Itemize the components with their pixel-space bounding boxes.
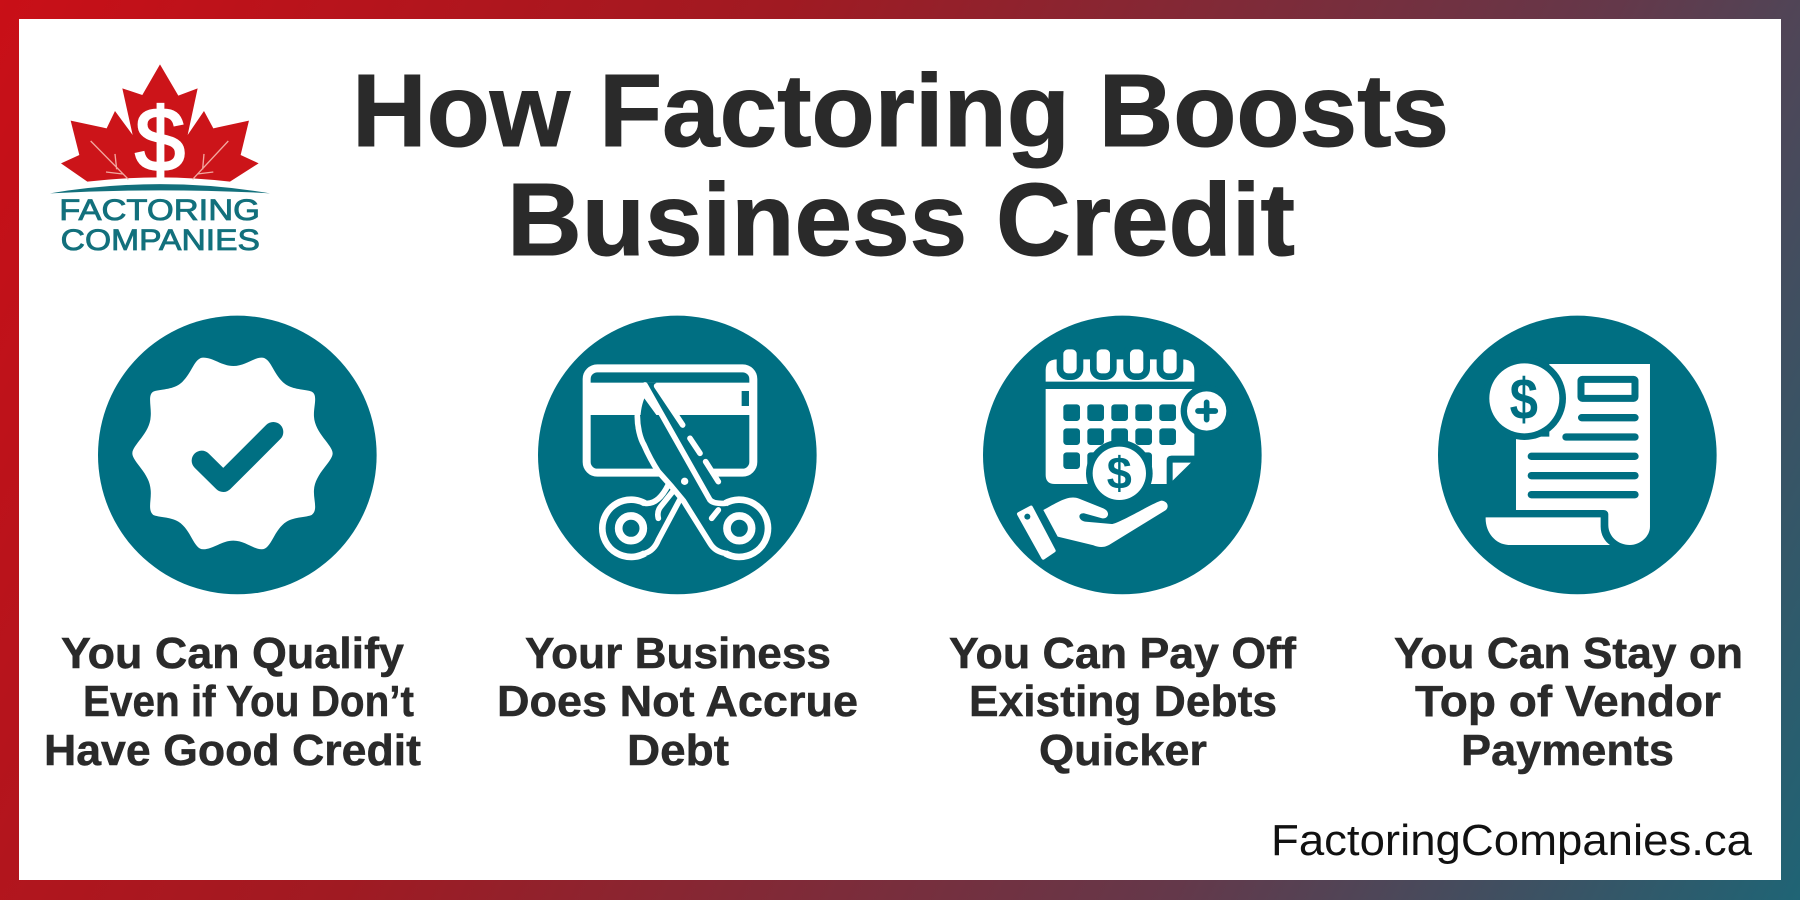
calendar body [1046, 389, 1194, 484]
left handle ring [602, 500, 645, 557]
caption 3 [949, 629, 1296, 775]
dollar coin [1483, 357, 1566, 440]
website url: FactoringCompanies.ca [1271, 816, 1753, 865]
plus badge [1181, 385, 1233, 437]
title line 1: How Factoring Boosts [352, 53, 1449, 168]
checkmark [202, 432, 273, 482]
caption 3: Existing Debts [969, 677, 1277, 726]
binder tabs [1060, 346, 1180, 377]
leaf veins [91, 141, 228, 179]
invoice page [1516, 364, 1650, 545]
invoice box [1581, 379, 1635, 398]
caption 1 [44, 629, 421, 775]
logo wordmark line 2: COMPANIES [61, 224, 260, 257]
caption 1: Even if You Don’t [83, 677, 414, 726]
right handle ring [725, 500, 768, 557]
icon: invoice with dollar coin [1438, 316, 1717, 594]
dollar stem [157, 167, 163, 180]
cuff button [1024, 514, 1030, 520]
caption 2: Does Not Accrue [497, 677, 858, 726]
title line 2: Business Credit [507, 162, 1295, 277]
date grid [1063, 404, 1176, 469]
teal circle [98, 316, 377, 594]
right blade band [647, 383, 722, 507]
card stripe [589, 383, 751, 415]
teal circle [1438, 316, 1717, 594]
caption 3: You Can Pay Off [949, 629, 1296, 678]
card signature box [742, 391, 749, 406]
teal circle [538, 316, 817, 594]
pivot [681, 478, 688, 485]
icon: maple leaf [61, 64, 259, 182]
icon: scissors cutting credit card [538, 316, 817, 594]
caption 3: Quicker [1039, 726, 1207, 775]
caption 2: Debt [627, 726, 729, 775]
corner fold [1173, 463, 1191, 481]
caption 2 [497, 629, 858, 775]
left blade crescent [640, 398, 715, 507]
coin: $ [1107, 448, 1132, 499]
caption 4: You Can Stay on [1394, 629, 1743, 678]
title [352, 53, 1449, 277]
card outline [587, 368, 753, 473]
dollar coin: $ [1510, 367, 1538, 432]
icon: verified badge with checkmark [98, 316, 377, 594]
coin [1086, 440, 1153, 507]
horizon arc [50, 184, 270, 193]
logo: Factoring Companies maple leaf [50, 64, 270, 257]
icon: calendar, coin and hand [983, 316, 1262, 594]
caption 4: Payments [1461, 726, 1674, 775]
caption 4: Top of Vendor [1415, 677, 1721, 726]
caption 1: You Can Qualify [61, 629, 405, 678]
caption 4 [1394, 629, 1743, 775]
scalloped badge [132, 358, 333, 549]
logo wordmark line 1: FACTORING [59, 194, 260, 227]
calendar header [1046, 359, 1194, 382]
scissor lines [637, 385, 725, 553]
scroll foot [1486, 517, 1610, 545]
right inner ring [727, 516, 752, 541]
left inner ring [619, 516, 643, 541]
invoice lines [1531, 418, 1635, 495]
teal circle [983, 316, 1262, 594]
caption 1: Have Good Credit [44, 726, 421, 775]
cuff [1019, 508, 1054, 558]
caption 2: Your Business [525, 629, 831, 678]
dollar sign: $ [135, 91, 185, 191]
scissors [602, 383, 768, 557]
hand [1043, 497, 1168, 547]
